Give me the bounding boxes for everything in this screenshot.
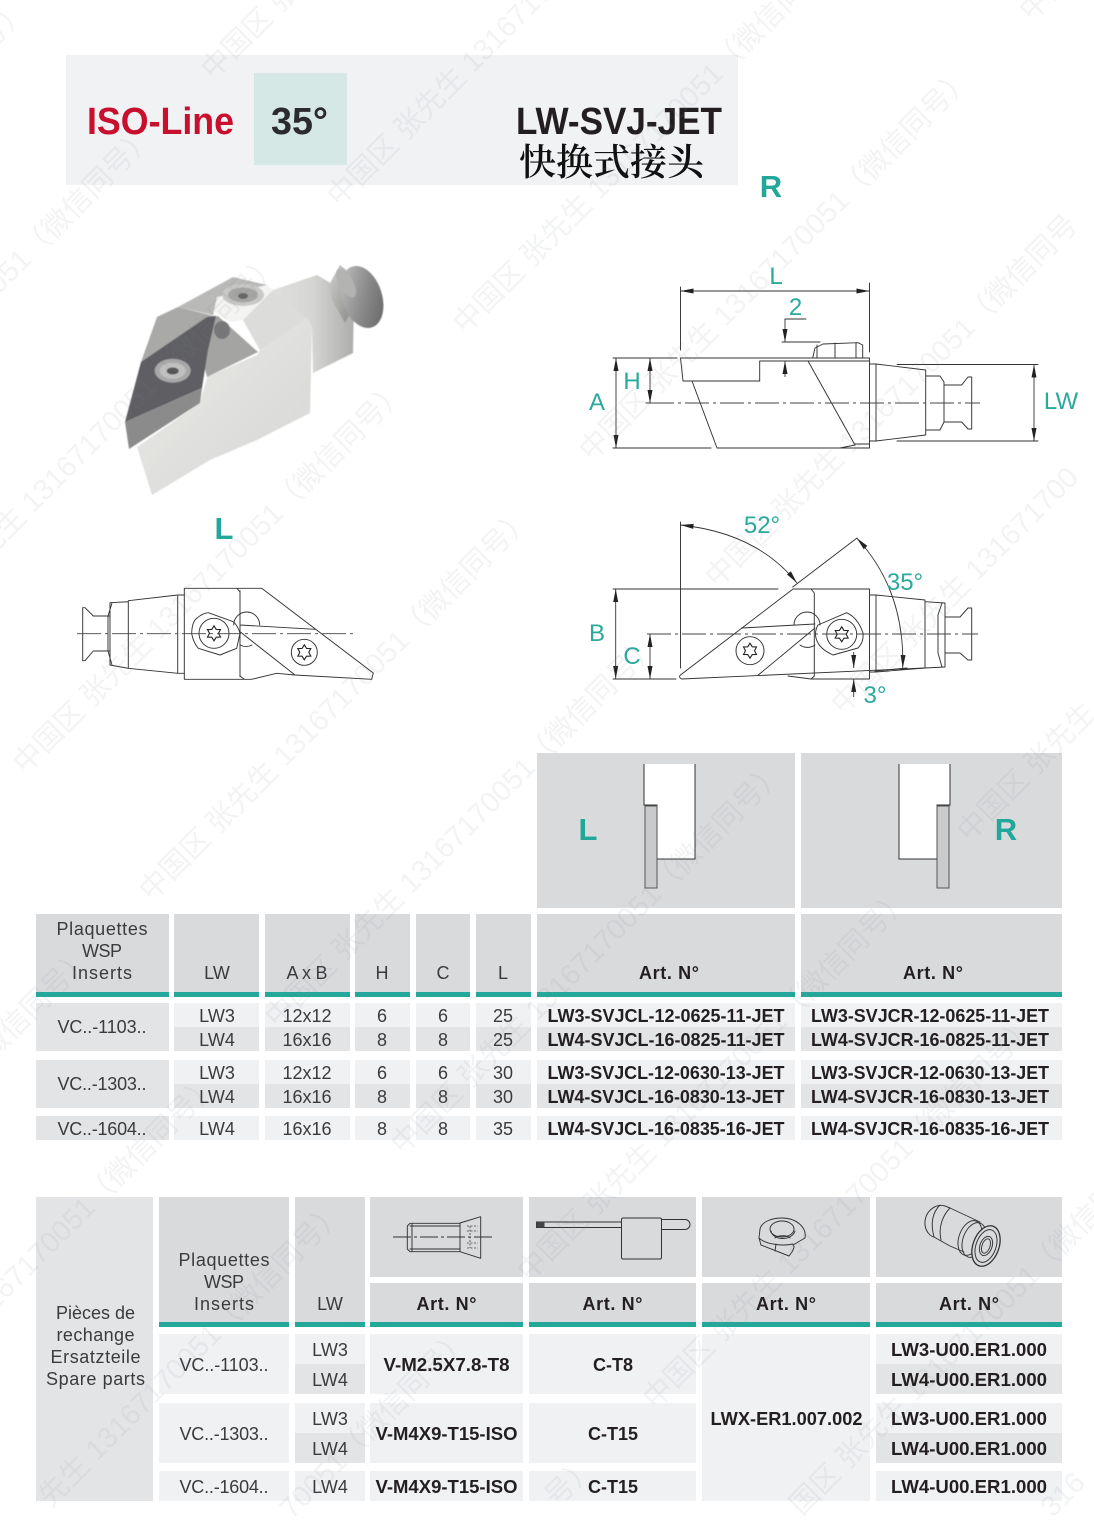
row group: VC..-1103..: LW4-SVJCL-16-0825-11-JET [548,1030,785,1050]
panel: R handed icon: R [995,812,1017,847]
dimension: L: L [769,263,783,290]
row group: VC..-1103..: 6 [377,1006,387,1026]
row: VC..-1604..: VC..-1604.. [180,1477,268,1497]
side drawing: R elevation with dimensions [589,263,1078,448]
angle: 3°: 3° [864,682,886,709]
row group: VC..-1303..: LW4-SVJCL-16-0830-13-JET [548,1087,784,1107]
dimension: 2: 2 [789,294,802,321]
table header: L [498,963,508,983]
row group: VC..-1103..: 12x12 [282,1006,332,1026]
dimension: A: A [589,389,605,416]
side label: spare parts: Pièces de [56,1303,135,1323]
column headers: LW [317,1294,343,1314]
row: VC..-1303..: V-M4X9-T15-ISO [376,1424,518,1444]
side label: spare parts: rechange [56,1325,134,1345]
dimension: B [589,589,616,679]
row group: VC..-1604..: LW4-SVJCL-16-0835-16-JET [548,1119,784,1139]
row group: VC..-1103..: LW4 [199,1030,235,1050]
row group: VC..-1103..: LW3 [199,1006,235,1026]
merged cell: washer article [702,1334,870,1501]
dimension: 2 [785,294,802,377]
row group: VC..-1103..: LW3-SVJCL-12-0625-11-JET [548,1006,785,1026]
panel: R handed icon [801,753,1062,908]
watermark: 中国区 张先生 13167170051（微信同号） [573,61,979,467]
tag: ISO-Line: ISO-Line [87,101,234,143]
row: VC..-1303..: LW3 [312,1409,348,1429]
row group: VC..-1604..: LW4-SVJCR-16-0835-16-JET [811,1119,1049,1139]
dimension: B: B [589,620,605,647]
row group: VC..-1303..: LW3-SVJCL-12-0630-13-JET [548,1063,784,1083]
angle badge: 35° [271,101,328,143]
row group: VC..-1604..: 8 [438,1119,448,1139]
watermark: 中国区 张先生 13167170051（微信同号） [637,1009,1043,1415]
table header [36,914,1062,997]
label: R: R [760,169,782,204]
row group: VC..-1303..: 8 [377,1087,387,1107]
side label: spare parts [36,1197,153,1501]
row group: VC..-1103..: 16x16 [282,1030,332,1050]
row: VC..-1604..: LW4 [312,1477,348,1497]
table header: Plaquettes [56,919,148,939]
row group: VC..-1303..: 30 [493,1087,513,1107]
watermark: 号） [539,1450,602,1513]
header banner [66,55,738,186]
product subtitle: 快换式接头 [519,132,706,186]
watermark: 中国区 张先生 131671700 [825,461,1085,721]
watermark: 中国区 张先生 13167170051（微信同号） [7,374,413,780]
dimension: C: C [623,643,641,670]
panel: L handed icon: L [579,812,597,847]
row: VC..-1103..: LW3-U00.ER1.000 [891,1340,1047,1360]
table header: A x B [286,963,328,983]
row: VC..-1303.. [159,1403,1062,1463]
row: VC..-1303..: C-T15 [588,1424,638,1444]
product title: LW-SVJ-JET [516,101,722,143]
dimension: LW: LW [1044,388,1078,415]
row group: VC..-1303..: VC..-1303.. [58,1074,146,1094]
angle: 3° [854,652,886,709]
dimension: C [623,634,650,679]
row group: VC..-1303..: 6 [438,1063,448,1083]
watermark: 70051（微信同号） [273,1322,477,1525]
row group: VC..-1604..: LW4 [199,1119,235,1139]
row group: VC..-1103..: LW3-SVJCR-12-0625-11-JET [811,1006,1049,1026]
column headers: Art. N° [756,1294,816,1314]
table header: Art. N° [639,963,699,983]
dimension: H: H [623,368,641,395]
row group: VC..-1103..: 25 [493,1030,513,1050]
row: VC..-1604..: V-M4X9-T15-ISO [376,1477,518,1497]
row group: VC..-1604..: 8 [377,1119,387,1139]
table header: LW [204,963,230,983]
table header: WSP [82,941,122,961]
side label: spare parts: Ersatzteile [50,1347,140,1367]
icon: shank adapter [876,1197,1062,1277]
watermark: 中国区 张先生 13167170051（微信同号） [259,628,665,1034]
column headers: Art. N° [939,1294,999,1314]
watermark: 中国区 张先生 13167170051（微信同号） [385,755,791,1161]
row: VC..-1604..: C-T15 [588,1477,638,1497]
column headers: Plaquettes [178,1250,270,1270]
watermark: 316 [1035,1467,1092,1523]
panel: L handed icon [537,753,795,908]
angle: 52° [680,512,797,583]
table: tool dimensions and article numbers [36,914,1062,1140]
column headers: Art. N° [582,1294,642,1314]
row: VC..-1103..: VC..-1103.. [180,1355,268,1375]
row group: VC..-1303..: LW3-SVJCR-12-0630-13-JET [811,1063,1049,1083]
row: VC..-1303..: LW4-U00.ER1.000 [891,1439,1047,1459]
row group: VC..-1303..: 16x16 [282,1087,332,1107]
row group: VC..-1303..: 30 [493,1063,513,1083]
row: VC..-1604.. [159,1471,1062,1501]
row group: VC..-1103.. [36,1003,1062,1051]
row: VC..-1103..: V-M2.5X7.8-T8 [384,1355,510,1375]
row group: VC..-1303..: 6 [377,1063,387,1083]
row: VC..-1103.. [159,1334,1062,1394]
angle: 35° [857,538,923,668]
watermark: 中国区 张先生 13167170051（微信同号 [699,208,1084,594]
dimension: LW [1034,364,1078,441]
table header: Inserts [72,963,132,983]
row group: VC..-1103..: LW4-SVJCR-16-0825-11-JET [811,1030,1049,1050]
row group: VC..-1103..: 25 [493,1006,513,1026]
table header: C [436,963,450,983]
row group: VC..-1604..: VC..-1604.. [58,1119,146,1139]
row group: VC..-1604..: 16x16 [282,1119,332,1139]
row group: VC..-1303..: LW3 [199,1063,235,1083]
column headers: WSP [204,1272,244,1292]
row group: VC..-1103..: 8 [438,1030,448,1050]
row: VC..-1103..: C-T8 [593,1355,633,1375]
column headers: Art. N° [416,1294,476,1314]
row group: VC..-1303..: 12x12 [282,1063,332,1083]
icon: screw [370,1197,523,1277]
row: VC..-1103..: LW4 [312,1370,348,1390]
product photo [125,260,391,495]
table header: H [376,963,388,983]
row group: VC..-1303..: LW4-SVJCR-16-0830-13-JET [811,1087,1049,1107]
row: VC..-1604..: LW4-U00.ER1.000 [891,1477,1047,1497]
row: VC..-1303..: LW4 [312,1439,348,1459]
dimension: H [623,358,650,403]
plan drawing: R with angles [589,512,978,709]
table header: Art. N° [903,963,963,983]
side label: spare parts: Spare parts [46,1369,145,1389]
plan drawing: L [77,588,373,679]
row group: VC..-1103..: 8 [377,1030,387,1050]
table: spare parts [36,1197,1062,1501]
row group: VC..-1303..: LW4 [199,1087,235,1107]
angle: 52°: 52° [744,512,780,539]
row: VC..-1303..: VC..-1303.. [180,1424,268,1444]
row: VC..-1103..: LW3 [312,1340,348,1360]
row group: VC..-1303..: 8 [438,1087,448,1107]
column headers [159,1197,1062,1327]
row group: VC..-1303.. [36,1060,1062,1108]
row: VC..-1303..: LW3-U00.ER1.000 [891,1409,1047,1429]
watermark: 中国区 张先生 13167170051（微信同号） [511,882,917,1288]
row: VC..-1103..: LW4-U00.ER1.000 [891,1370,1047,1390]
row group: VC..-1103..: VC..-1103.. [58,1017,146,1037]
angle: 35°: 35° [887,569,923,596]
row group: VC..-1604..: 35 [493,1119,513,1139]
dimension: A [589,358,616,448]
merged cell: washer article: LWX-ER1.007.002 [710,1409,862,1429]
icon: clamp nut [702,1197,870,1277]
row group: VC..-1604.. [36,1116,1062,1140]
row group: VC..-1103..: 6 [438,1006,448,1026]
watermark: 先生 13167170051（微信同号） [32,1195,351,1513]
icon: torx key [529,1197,696,1277]
watermark: 中国区 张先生 13167170051（微信同号） [133,501,539,907]
angle badge [254,73,347,165]
column headers: Inserts [194,1294,254,1314]
label: L: L [215,511,233,546]
